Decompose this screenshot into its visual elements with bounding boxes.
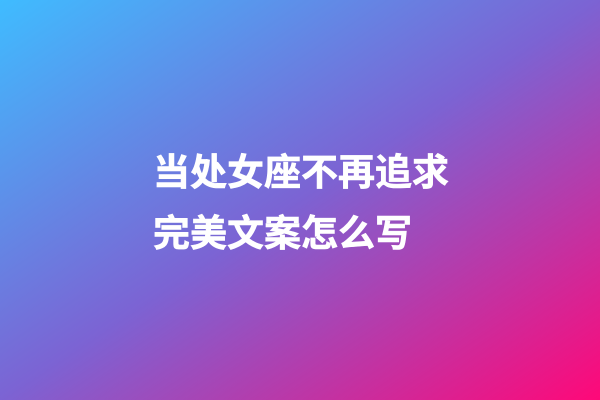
title: line 2: 完美文案怎么写 <box>153 213 412 254</box>
title: line 1: 当处女座不再追求 <box>153 152 449 193</box>
